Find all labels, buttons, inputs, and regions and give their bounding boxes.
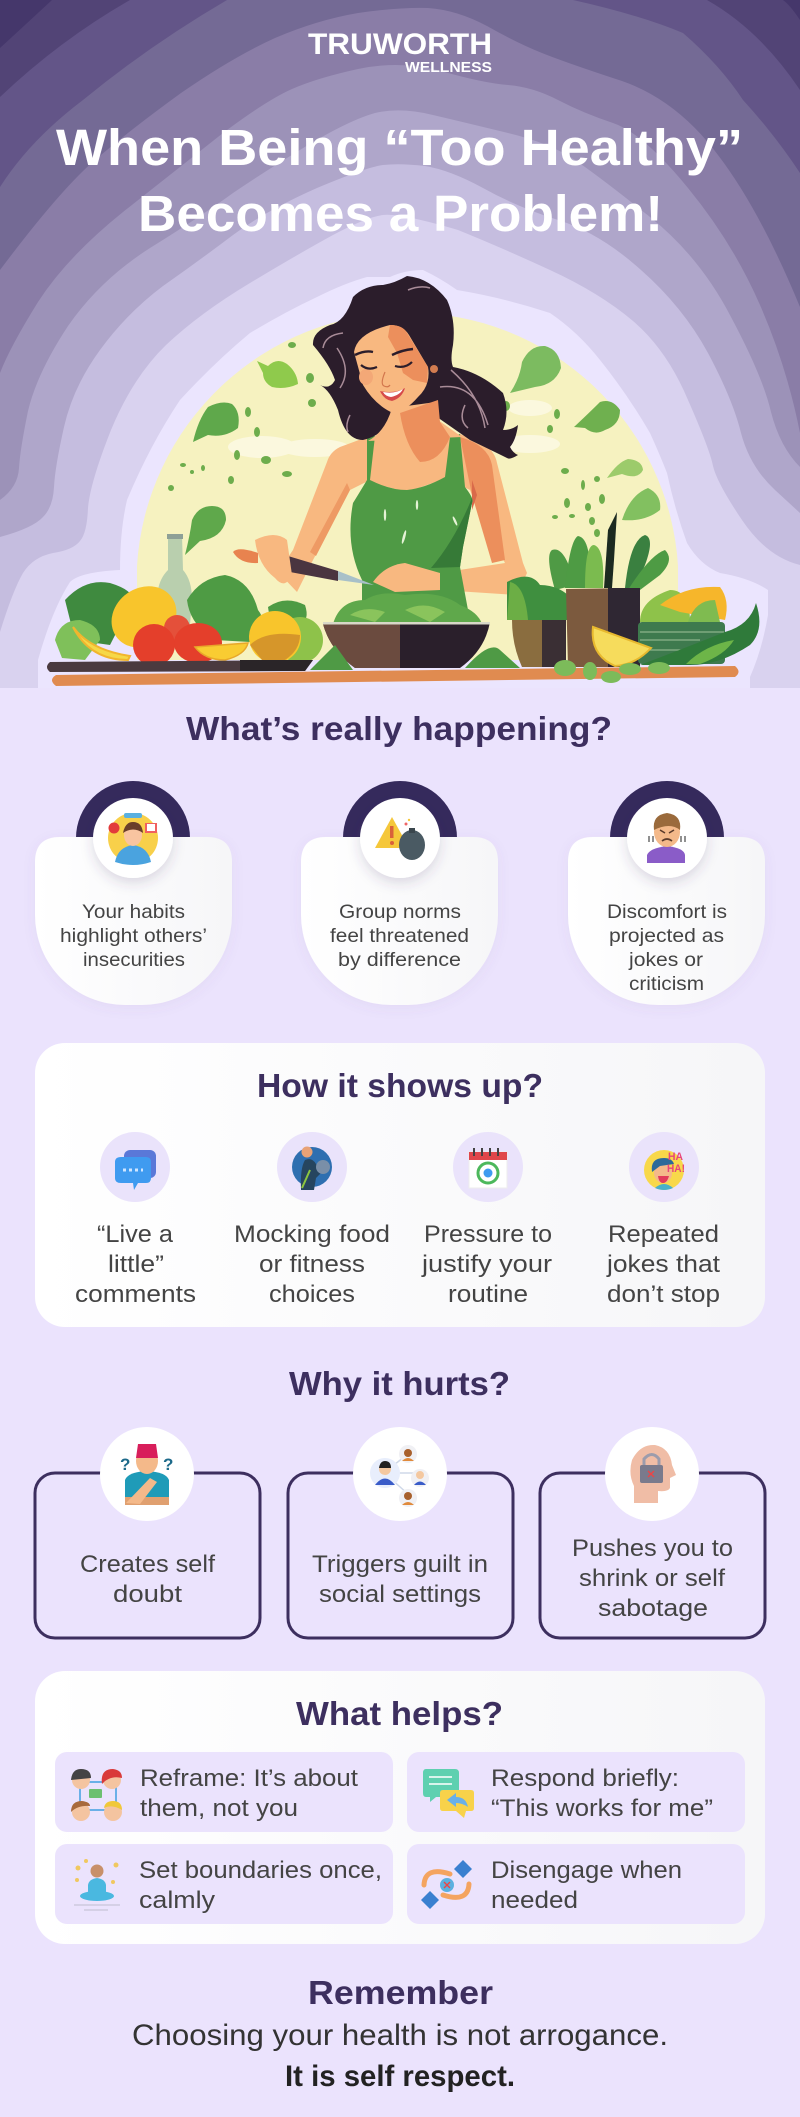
card text: shrink or self bbox=[579, 1565, 725, 1592]
icon: chat bubbles bbox=[115, 1150, 156, 1190]
woman's hair bbox=[313, 276, 518, 459]
clouds bbox=[228, 400, 560, 458]
item text: jokes that bbox=[606, 1251, 720, 1278]
tip text bbox=[140, 1765, 358, 1822]
heading: How it shows up? bbox=[257, 1067, 543, 1104]
card text bbox=[60, 901, 207, 971]
tip text: needed bbox=[491, 1887, 578, 1914]
item text: little” bbox=[108, 1251, 164, 1278]
logo: TRUWORTH bbox=[308, 28, 492, 61]
flying leaves bbox=[168, 342, 643, 555]
card text: Triggers guilt in bbox=[312, 1551, 488, 1578]
card text: Creates self bbox=[80, 1551, 215, 1578]
card text bbox=[330, 901, 469, 971]
illustration: woman preparing salad bbox=[47, 276, 759, 686]
card text bbox=[80, 1551, 215, 1608]
heading: What’s really happening? bbox=[186, 710, 612, 747]
card 1: insecurities bbox=[35, 781, 232, 1005]
icon: thinking man: ? bbox=[163, 1455, 173, 1474]
tip text bbox=[491, 1857, 682, 1914]
item text: choices bbox=[269, 1281, 355, 1308]
card text bbox=[312, 1551, 488, 1608]
item text: justify your bbox=[421, 1251, 552, 1278]
icon: hands with diamonds bbox=[421, 1860, 472, 1909]
tip text bbox=[139, 1857, 382, 1914]
hair highlights bbox=[323, 287, 488, 432]
logo: WELLNESS bbox=[405, 59, 492, 76]
tip text bbox=[491, 1765, 713, 1822]
icon: warning and bomb bbox=[375, 817, 425, 860]
icon: laughing person bbox=[644, 1150, 685, 1190]
card 3: discomfort projected bbox=[568, 781, 765, 1005]
item text: Pressure to bbox=[424, 1221, 552, 1248]
card text: feel threatened bbox=[330, 925, 469, 947]
yellow sun arch bbox=[137, 312, 678, 660]
card text: Discomfort is bbox=[607, 901, 727, 923]
item text bbox=[75, 1221, 196, 1308]
tip: reframe bbox=[55, 1752, 393, 1832]
card text: Your habits bbox=[82, 901, 185, 923]
woman's neck bbox=[368, 402, 462, 441]
icon: thinking man: ? bbox=[120, 1455, 130, 1474]
heading: Remember: Remember bbox=[308, 1974, 493, 2011]
woman's arms and chest bbox=[278, 434, 527, 595]
item text bbox=[606, 1221, 720, 1308]
item: mocking food bbox=[234, 1132, 390, 1308]
item text: routine bbox=[448, 1281, 528, 1308]
icon: four faces bbox=[71, 1769, 122, 1821]
card 2: group norms bbox=[301, 781, 498, 1005]
concentric arch background bbox=[0, 0, 800, 688]
icon: calendar routine bbox=[469, 1148, 507, 1188]
tip text: calmly bbox=[139, 1887, 216, 1914]
item text: or fitness bbox=[259, 1251, 365, 1278]
cutting board bbox=[47, 660, 313, 672]
item: pressure to justify bbox=[421, 1132, 552, 1308]
neck shadow bbox=[400, 400, 450, 462]
icon: laughing person: HA! bbox=[667, 1163, 685, 1175]
table top bbox=[52, 666, 738, 686]
tip: disengage bbox=[407, 1844, 745, 1924]
heading: What helps? bbox=[296, 1695, 503, 1732]
closing line 1: Choosing your health is not arrogance. bbox=[132, 2019, 668, 2052]
icon: thinking man bbox=[120, 1444, 173, 1505]
tip: respond briefly bbox=[407, 1752, 745, 1832]
icon: social network bbox=[370, 1445, 429, 1507]
card text: sabotage bbox=[598, 1595, 708, 1622]
icon: meditating person bbox=[74, 1859, 120, 1910]
tip text: Respond briefly: bbox=[491, 1765, 679, 1792]
title: When Being “Too Healthy” bbox=[56, 119, 743, 176]
knife bbox=[233, 549, 374, 585]
item text: Mocking food bbox=[234, 1221, 390, 1248]
closing line 2: It is self respect. bbox=[285, 2060, 515, 2093]
right produce and pots bbox=[507, 488, 759, 667]
panel: What helps bbox=[35, 1671, 765, 1944]
icon: laughing person: HA bbox=[668, 1151, 683, 1163]
salad and bowl bbox=[310, 593, 520, 670]
title: Becomes a Problem! bbox=[138, 185, 663, 242]
card text: criticism bbox=[629, 973, 704, 995]
item text bbox=[421, 1221, 552, 1308]
card text bbox=[572, 1535, 733, 1622]
icon: head with lock bbox=[630, 1445, 676, 1503]
scattered leaves on table bbox=[554, 660, 670, 683]
hero header bbox=[0, 0, 800, 688]
icon: person with habits bbox=[108, 813, 158, 865]
section: Why it hurts bbox=[35, 1365, 765, 1638]
item: repeated jokes bbox=[606, 1132, 720, 1308]
card text: projected as bbox=[609, 925, 724, 947]
tip text: “This works for me” bbox=[491, 1795, 713, 1822]
card text: highlight others’ bbox=[60, 925, 207, 947]
item text: “Live a bbox=[97, 1221, 173, 1248]
logo bbox=[308, 28, 492, 76]
card text: social settings bbox=[319, 1581, 481, 1608]
icon: fitness man bbox=[292, 1146, 332, 1190]
item text: comments bbox=[75, 1281, 196, 1308]
item text: don’t stop bbox=[607, 1281, 720, 1308]
title bbox=[56, 119, 743, 242]
left produce bbox=[55, 534, 323, 666]
green dress bbox=[350, 434, 473, 610]
card: shrink or self sabotage bbox=[540, 1427, 765, 1638]
card text: Pushes you to bbox=[572, 1535, 733, 1562]
woman's face bbox=[354, 325, 438, 413]
card text: jokes or bbox=[628, 949, 704, 971]
card text: insecurities bbox=[83, 949, 185, 971]
card text bbox=[607, 901, 727, 995]
item text: Repeated bbox=[608, 1221, 719, 1248]
icon: speech bubbles bbox=[423, 1769, 474, 1818]
closing message bbox=[132, 1974, 668, 2093]
panel: How it shows up bbox=[35, 1043, 765, 1327]
tip text: Set boundaries once, bbox=[139, 1857, 382, 1884]
tip: set boundaries bbox=[55, 1844, 393, 1924]
tip text: Disengage when bbox=[491, 1857, 682, 1884]
tip text: them, not you bbox=[140, 1795, 298, 1822]
heading: Why it hurts? bbox=[289, 1365, 510, 1402]
hands bbox=[255, 535, 440, 592]
tip text: Reframe: It’s about bbox=[140, 1765, 358, 1792]
card text: by difference bbox=[338, 949, 461, 971]
card: guilt in social settings bbox=[288, 1427, 513, 1638]
card text: Group norms bbox=[339, 901, 461, 923]
section: What's really happening bbox=[35, 710, 765, 1005]
item: comments bbox=[75, 1132, 196, 1308]
icon: angry man bbox=[647, 813, 685, 863]
item text bbox=[234, 1221, 390, 1308]
card: self doubt bbox=[35, 1427, 260, 1638]
card text: doubt bbox=[113, 1581, 182, 1608]
